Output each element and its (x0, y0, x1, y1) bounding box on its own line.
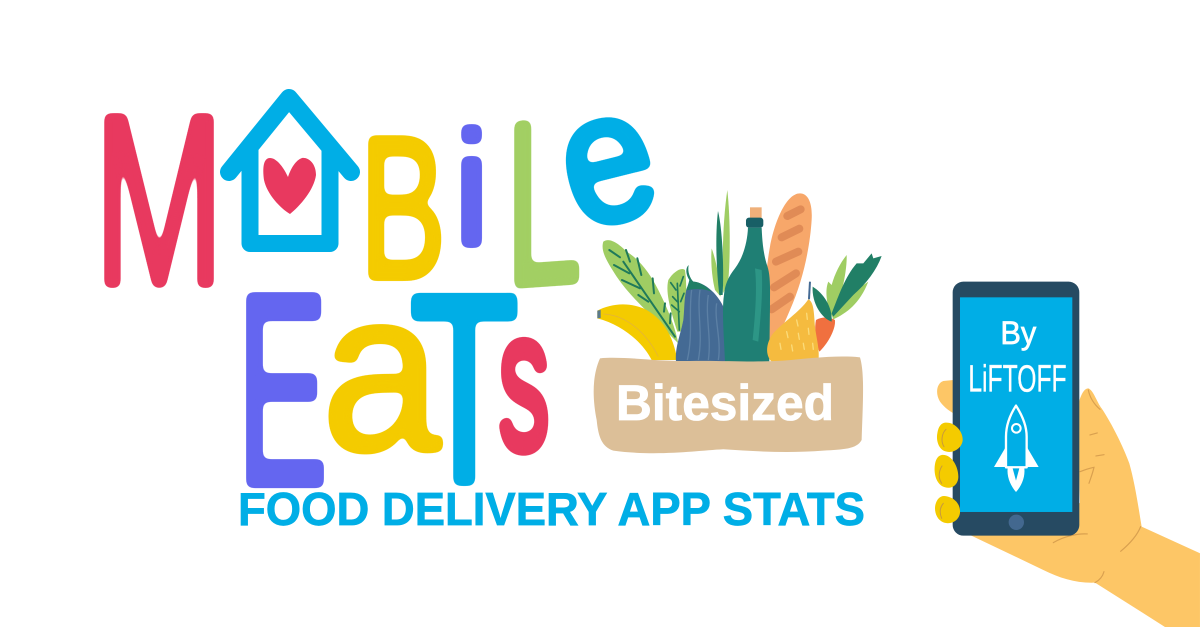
carrot (815, 317, 835, 352)
large leaf (603, 240, 678, 343)
baguette (762, 193, 812, 360)
letter E: E (237, 237, 328, 542)
banana (597, 304, 677, 360)
spring onion blades (711, 190, 730, 297)
phone text: By: By (1000, 315, 1036, 351)
icon: rocket (994, 406, 1039, 492)
wine bottle (723, 207, 770, 362)
paper bag (594, 357, 863, 453)
icon: house as letter O (229, 98, 351, 244)
letter M: M (93, 63, 225, 339)
illustration: hand holding phone (935, 282, 1200, 627)
hand (937, 380, 1200, 627)
phone body (953, 282, 1079, 536)
title letters group (93, 46, 676, 542)
letter s: s (498, 268, 549, 492)
illustration: grocery bag with food (594, 190, 882, 453)
letter e: e (537, 46, 676, 269)
phone screen (960, 297, 1072, 512)
pear (767, 282, 819, 362)
eggplant (676, 265, 729, 362)
icon: heart (263, 158, 316, 214)
carrot leaf (813, 287, 832, 322)
letter a: a (321, 242, 441, 500)
home button (1009, 515, 1024, 530)
small leaf (667, 269, 686, 332)
phone text: Liftoff: LiFTOFF (968, 357, 1067, 400)
carrot greens (826, 253, 882, 319)
fingers (935, 423, 963, 523)
letter i: i (454, 99, 490, 280)
title: Mobile Eats lettering (93, 46, 676, 542)
bag label: Bitesized: Bitesized (616, 375, 834, 431)
subtitle: FOOD DELIVERY APP STATS (238, 483, 865, 535)
letter T: T (410, 239, 519, 540)
letter L: L (505, 69, 582, 336)
letter B: B (360, 96, 446, 322)
